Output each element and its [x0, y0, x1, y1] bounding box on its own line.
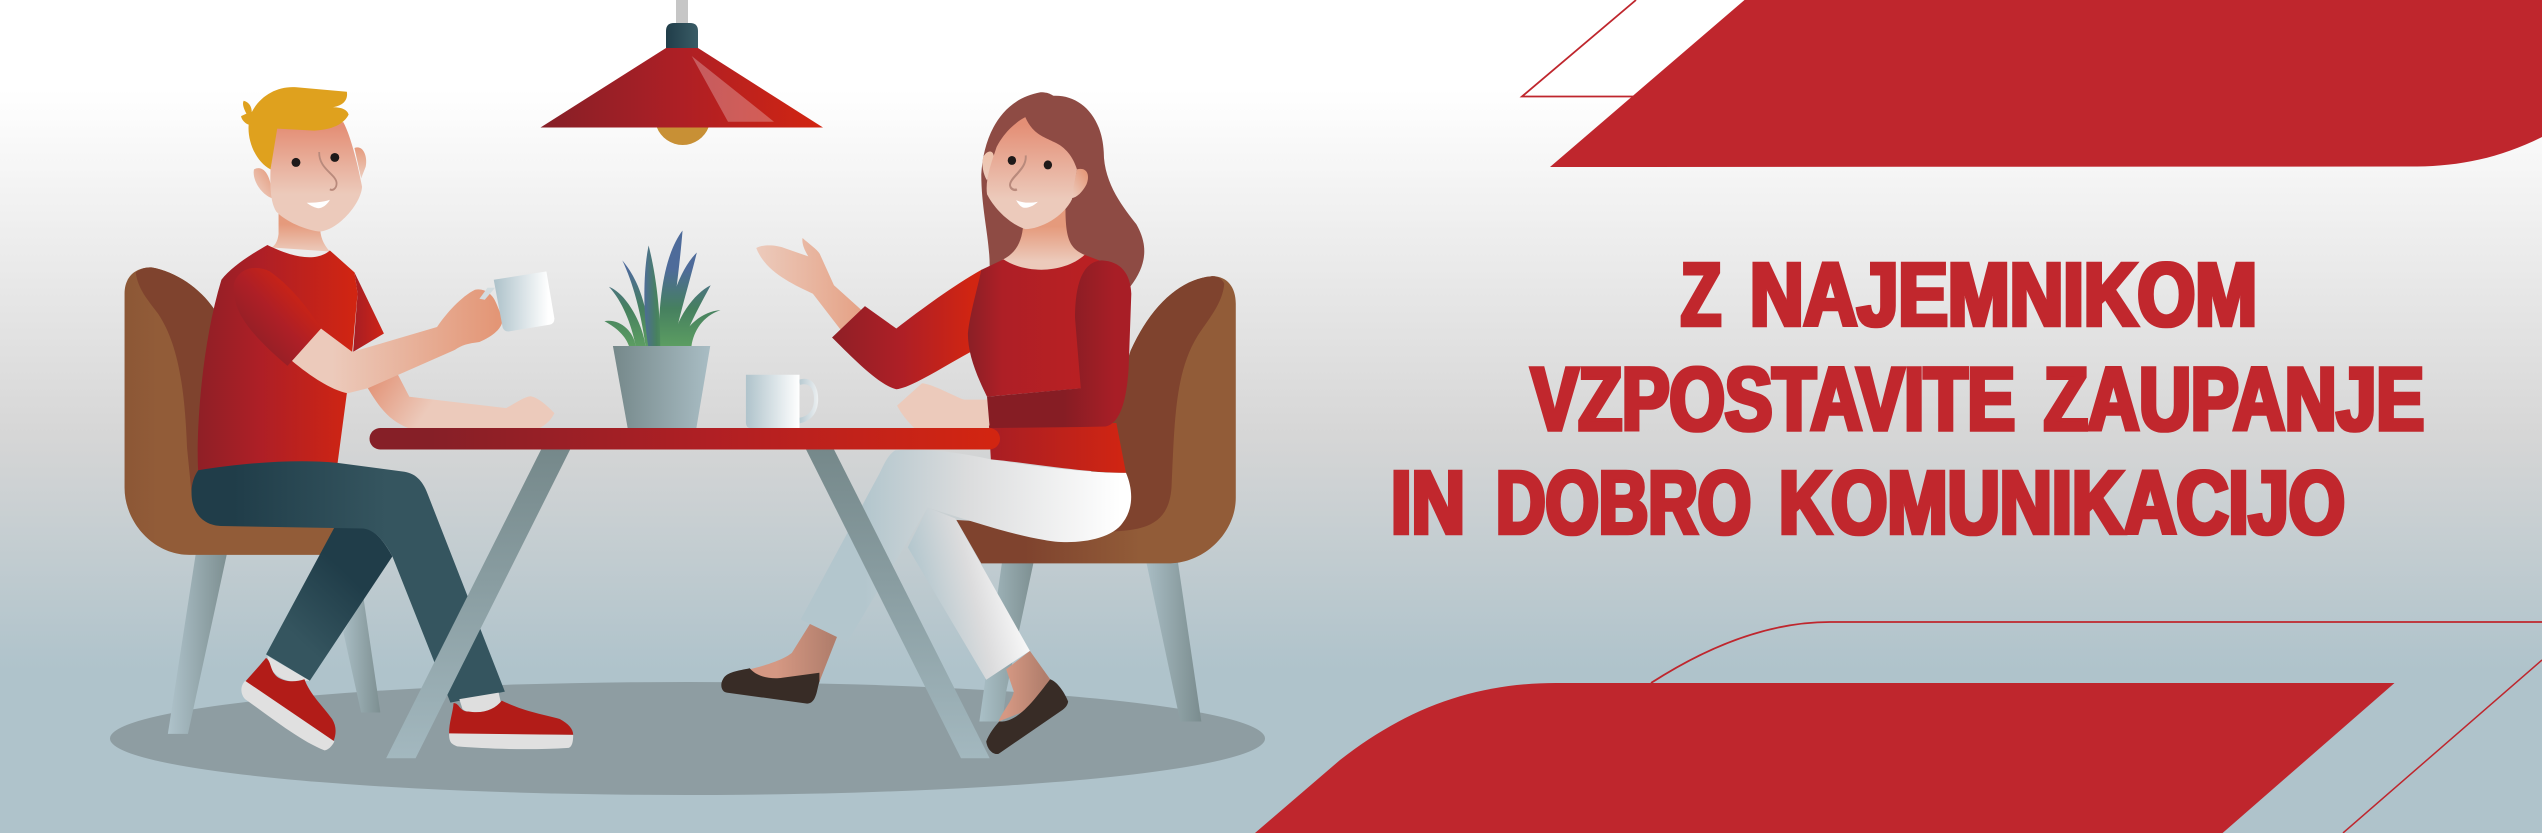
- woman's raised hand: [756, 238, 863, 331]
- man's far lower leg: [266, 528, 392, 681]
- lamp highlight: [692, 56, 774, 122]
- right eye: [330, 153, 339, 162]
- bottom red banner shape: [1255, 683, 2394, 833]
- woman's blouse: [968, 255, 1102, 397]
- woman's head: [982, 117, 1088, 229]
- floor shadow ellipse: [110, 682, 1265, 795]
- top right red banner shape: [1550, 0, 2542, 167]
- smile: [307, 200, 330, 208]
- bottom right thin diagonal line: [2343, 660, 2542, 833]
- heading line 3: KOMUNIKACIJO: [1779, 454, 2345, 554]
- left ear: [982, 152, 994, 180]
- man's far sleeve: [353, 272, 384, 352]
- nose: [319, 152, 337, 190]
- lamp shade: [540, 48, 823, 128]
- man's right shoe: [449, 701, 573, 749]
- face: [270, 122, 362, 232]
- hanging lamp: [540, 0, 823, 145]
- woman's hand on table: [897, 383, 993, 433]
- left ear: [254, 168, 272, 198]
- woman's blouse waist: [989, 423, 1126, 473]
- chair seat and back: [956, 276, 1236, 563]
- man's near arm: [292, 289, 503, 393]
- woman's left flat shoe: [721, 668, 819, 704]
- chair inner back: [136, 267, 214, 493]
- heading line 1: NAJEMNIKOM: [1750, 245, 2257, 345]
- woman's sleeve: [832, 269, 999, 389]
- mug on table: [746, 375, 816, 428]
- table: [370, 428, 1000, 758]
- plant pot: [613, 346, 710, 428]
- mug handle: [800, 382, 816, 421]
- man seated on chair: [125, 87, 573, 750]
- face: [987, 117, 1077, 229]
- heading line 3: DOBRO: [1496, 454, 1751, 554]
- man's mug: [479, 271, 554, 332]
- woman's right flat shoe: [986, 679, 1068, 754]
- top thin red outline: [1522, 0, 1640, 96]
- woman's trousers hips and far leg: [801, 450, 1131, 642]
- chair leg back: [1146, 560, 1201, 721]
- bottom thin red curved line: [1651, 622, 2542, 683]
- woman's near shin: [908, 508, 1030, 680]
- man's head: [241, 87, 366, 232]
- man's neck: [272, 212, 330, 251]
- woman's chair: [956, 276, 1236, 721]
- chair leg back: [343, 597, 380, 713]
- heading line 2: [1531, 350, 2424, 450]
- man's chair: [125, 267, 380, 734]
- left eye: [292, 158, 300, 167]
- man's left sock: [267, 656, 310, 682]
- left eye: [1008, 156, 1016, 165]
- heading line 3: IN: [1391, 454, 1465, 554]
- right eye: [1044, 160, 1052, 169]
- potted plant: [604, 231, 720, 428]
- plant leaves: [604, 231, 720, 346]
- lamp socket: [666, 23, 698, 48]
- table leg right: [805, 448, 990, 758]
- lamp bulb: [657, 127, 709, 145]
- woman seated on chair: [721, 92, 1236, 754]
- table top: [370, 428, 1000, 450]
- heading line 2: ZAUPANJE: [2044, 350, 2424, 450]
- hair: [241, 87, 349, 169]
- heading line 2: VZPOSTAVITE: [1531, 350, 2015, 450]
- mug body: [746, 375, 800, 428]
- man's near sleeve: [234, 268, 321, 366]
- right ear: [354, 147, 366, 178]
- man's left shoe: [241, 658, 336, 750]
- heading line 1: Z: [1681, 245, 1721, 345]
- smile: [1016, 200, 1038, 208]
- man's t-shirt: [198, 245, 358, 472]
- woman's left foot: [750, 624, 837, 682]
- heading text: [1391, 245, 2424, 554]
- man's right sock: [459, 693, 501, 713]
- right ear: [1071, 169, 1088, 198]
- woman's upper arm: [987, 260, 1131, 428]
- chair leg front: [168, 552, 227, 734]
- woman's right foot: [999, 651, 1050, 721]
- lamp cord: [676, 0, 688, 25]
- man's far arm: [368, 368, 554, 428]
- woman's neck: [1002, 209, 1085, 270]
- chair seat and back: [125, 267, 337, 555]
- heading line 3: [1391, 454, 2345, 554]
- man's near leg and hips: [192, 461, 505, 703]
- woman's hair back: [981, 92, 1144, 286]
- nose: [1010, 155, 1026, 190]
- table leg left: [386, 448, 571, 758]
- chair leg front: [979, 560, 1034, 721]
- chair inner back: [1083, 276, 1224, 531]
